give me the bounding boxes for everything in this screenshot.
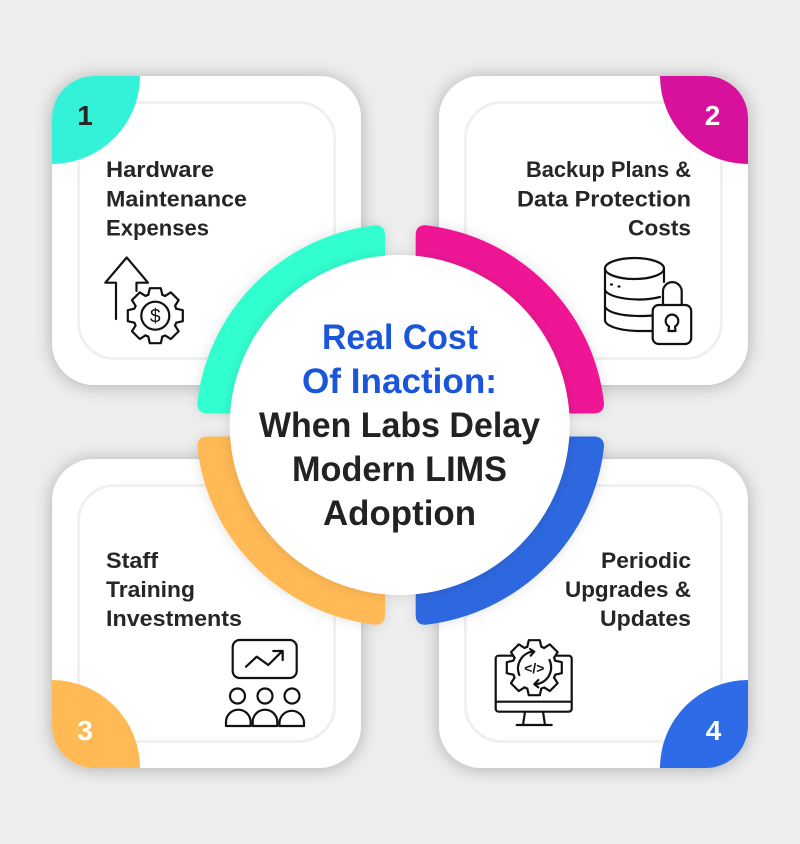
- heading: hardware maintenance expenses: Expenses: [106, 216, 209, 240]
- title: [259, 318, 541, 533]
- chart: central ring segments: [197, 225, 604, 625]
- badge: number 1: [52, 76, 140, 164]
- badge: number 4: 4: [706, 715, 722, 746]
- panel: card 4 periodic upgrades: [430, 450, 758, 778]
- heading: periodic upgrades and updates: Updates: [600, 606, 691, 631]
- heading: backup plans and data protection costs: Data Protection: [517, 186, 691, 212]
- icon: database with padlock: [605, 258, 691, 344]
- icon: rising arrow with dollar gear: [105, 258, 183, 343]
- badge: number 3: [52, 680, 140, 768]
- segment: blue arc: [416, 436, 604, 625]
- title: Of Inaction:: [302, 362, 497, 401]
- heading: staff training investments: [106, 548, 242, 631]
- segment: orange arc: [197, 436, 385, 625]
- segment: magenta arc: [416, 225, 604, 414]
- panel: card 2 backup plans: [430, 68, 758, 396]
- panel: card 1 hardware maintenance: [42, 68, 370, 396]
- title: Adoption: [323, 494, 476, 533]
- icon: presentation board with three people: [226, 640, 304, 726]
- badge: number 4: [660, 680, 748, 768]
- title: Real Cost: [322, 318, 478, 357]
- center circle: [230, 255, 570, 595]
- panel: card 3 staff training: [42, 450, 370, 778]
- heading: hardware maintenance expenses: Maintenance: [106, 186, 247, 212]
- heading: staff training investments: Investments: [106, 606, 242, 631]
- heading: staff training investments: Training: [106, 577, 195, 602]
- title: Modern LIMS: [292, 450, 507, 489]
- icon: rising arrow with dollar gear: $: [150, 306, 161, 328]
- heading: periodic upgrades and updates: Periodic: [601, 548, 691, 573]
- badge: number 3: 3: [77, 715, 93, 746]
- segment: teal arc: [197, 225, 385, 414]
- heading: periodic upgrades and updates: Upgrades &: [565, 577, 691, 602]
- badge: number 2: [660, 76, 748, 164]
- badge: number 2: 2: [705, 100, 720, 131]
- icon: monitor with code gear: [496, 640, 572, 725]
- heading: hardware maintenance expenses: [106, 157, 247, 240]
- icon: monitor with code gear: </>: [524, 660, 544, 676]
- heading: backup plans and data protection costs: [517, 157, 691, 240]
- title: When Labs Delay: [259, 406, 541, 445]
- heading: hardware maintenance expenses: Hardware: [106, 157, 214, 182]
- heading: staff training investments: Staff: [106, 548, 159, 573]
- heading: backup plans and data protection costs: Costs: [628, 216, 691, 240]
- heading: periodic upgrades and updates: [565, 548, 691, 631]
- heading: backup plans and data protection costs: Backup Plans &: [526, 157, 691, 182]
- badge: number 1: 1: [77, 100, 93, 131]
